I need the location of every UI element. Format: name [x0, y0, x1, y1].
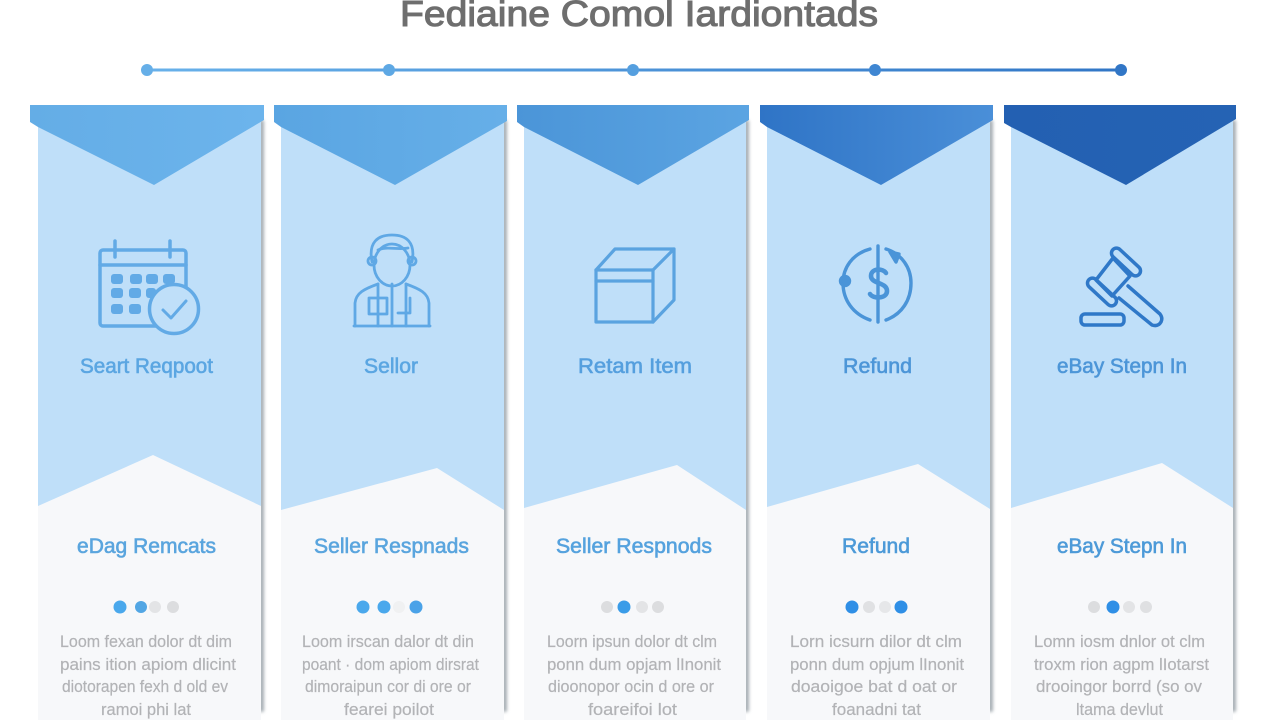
panel: step 4 [760, 105, 993, 720]
label: upper: Retam Item [578, 355, 692, 378]
body text: ltama devlut [1076, 701, 1163, 719]
body text [60, 633, 236, 719]
body text: Lomn iosm dnlor ot clm [1034, 633, 1205, 651]
panel: step 3 [517, 105, 749, 720]
timeline [141, 64, 1127, 76]
body text: dimoraipun cor di ore or [305, 678, 471, 696]
label: upper: Refund [843, 355, 912, 378]
body text: Loom fexan dolor dt dim [60, 633, 232, 651]
body text [302, 633, 479, 719]
body text: drooingor borrd (so ov [1036, 678, 1203, 696]
icon: gavel [1081, 246, 1162, 326]
body text: ramoi phi lat [101, 701, 191, 719]
status dots [601, 600, 664, 614]
label: lower: eDag Remcats [77, 535, 216, 558]
body text [790, 633, 964, 719]
body text [1034, 633, 1209, 719]
body text: poant · dom apiom dirsrat [302, 656, 479, 674]
status dots [1088, 600, 1152, 614]
label: lower: Seller Respnods [556, 535, 712, 558]
body text: pains ition apiom dlicint [60, 656, 236, 674]
body text: foareifoi lot [588, 701, 677, 719]
body text: doaoigoe bat d oat or [791, 678, 958, 696]
body text: fearei poilot [344, 701, 434, 719]
status dots [846, 600, 908, 614]
panel: step 5 [1004, 105, 1236, 720]
icon: calendar with check [100, 241, 198, 334]
body text: foanadni tat [832, 701, 921, 719]
label: upper: Seart Reqpoot [80, 355, 213, 378]
body text: diotorapen fexh d old ev [62, 678, 229, 696]
body text: Loorn ipsun dolor dt clm [547, 633, 717, 651]
body text: ponn dum opjum lInonit [790, 656, 964, 674]
body text: ponn dum opjam lInonit [547, 656, 721, 674]
status dots [356, 600, 422, 614]
body text [547, 633, 721, 719]
body text: dioonopor ocin d ore or [548, 678, 714, 696]
panel: step 1 [30, 105, 264, 720]
label: upper: Sellor [364, 355, 418, 378]
status dots [114, 600, 179, 614]
body text: Loom irscan dalor dt din [302, 633, 474, 651]
label: upper: eBay Stepn In [1057, 355, 1187, 378]
icon: box [596, 249, 674, 322]
label: lower: Seller Respnads [314, 535, 469, 558]
body text: Lorn icsurn dilor dt clm [790, 633, 962, 651]
icon: seller person [354, 235, 430, 326]
label: lower: eBay Stepn In [1057, 535, 1187, 558]
icon: refund dollar [840, 246, 911, 322]
panel: step 2 [274, 105, 507, 720]
body text: troxm rion agpm lIotarst [1034, 656, 1209, 674]
label: lower: Refund [842, 535, 910, 558]
